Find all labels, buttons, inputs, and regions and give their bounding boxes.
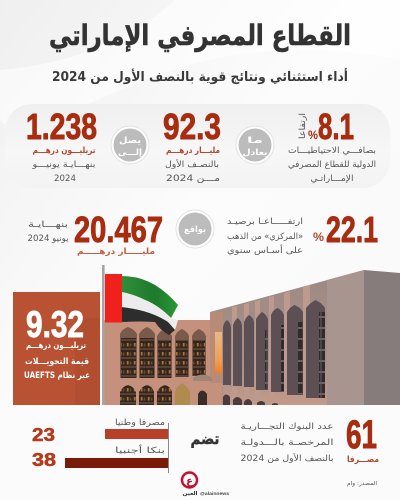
bar chart: national and foreign banks: 23 [32, 425, 55, 445]
bar chart: national and foreign banks [32, 418, 169, 473]
stat: 61 banks: 61 [346, 413, 377, 457]
stat: 22.1 percent: «المركزي» من الذهب [227, 232, 303, 242]
bar chart: national and foreign banks: مصرفا وطنيا [115, 418, 165, 428]
stat: 22.1 percent: % [313, 230, 324, 244]
bar chart: national and foreign banks: بنكا أجنبيا [115, 444, 165, 456]
flag of the UAE [102, 265, 178, 405]
right arches [223, 300, 325, 398]
stat: 22.1 percent: على أسـاس سنوي [227, 244, 303, 256]
stat: 8.1 percent: 8.1 [318, 106, 354, 147]
description: بالنصف الأول من 2024 [240, 453, 334, 464]
label: includes: تضم [190, 430, 220, 448]
stat row: gold reserves [28, 209, 378, 257]
stat: 1.238: تريليـــون درهـــم [32, 146, 96, 156]
building: central bank [104, 270, 400, 405]
stat: 1.238: 1.238 [26, 106, 97, 147]
stat: 61 banks [346, 413, 379, 465]
panel: top statistics [5, 104, 390, 188]
stat: 92.3 [163, 106, 221, 184]
bar chart: national and foreign banks: 38 [32, 450, 56, 470]
stat: 92.3: مـــن 2024 [166, 174, 220, 184]
panel: transfers value: عبر نظام UAEFTS [24, 371, 90, 381]
badge: equals: يعادل [242, 148, 268, 158]
stat: 20.467 [28, 209, 163, 257]
stat: 1.238 [26, 106, 97, 184]
description [240, 422, 334, 464]
stat: 20.467: بنهـــايـة [28, 220, 68, 230]
subtitle: أداء استثنائي ونتائج قوية بالنصف الأول من 2024 [52, 68, 348, 85]
panel: transfers value: تريليـــون درهـــم [26, 341, 86, 351]
logo: Al Ain News: ع [186, 476, 194, 487]
stat: 20.467: يونيو 2024 [28, 234, 69, 244]
badge: equals [236, 126, 274, 164]
section: number of banks [32, 413, 379, 473]
logo: Al Ain News [182, 472, 230, 497]
badge: amounting to [176, 210, 214, 248]
pilasters [232, 285, 310, 400]
stat: 8.1 percent: الإمـــاراتـي [310, 174, 354, 184]
stat: 8.1 percent: بصافـــي الاحتياطيـــات [288, 146, 376, 156]
stat: 61 banks: مصـــرفا [347, 455, 379, 465]
stat: 8.1 percent [288, 106, 376, 184]
panel: transfers value [13, 292, 100, 405]
stat: 22.1 percent [227, 209, 378, 256]
stat: 8.1 percent: الدولية للقطاع المصرفي [288, 160, 376, 170]
stat: 20.467: 20.467 [74, 209, 163, 250]
description: عدد البنوك التجـــاريـة [240, 422, 334, 432]
badge: amounting to: بواقع [184, 225, 206, 235]
description: المرخصـة بالـــدولـة [240, 438, 334, 448]
stat: 1.238: 2024 [54, 174, 76, 184]
panel: transfers value: قيمة التحويـــلات [25, 357, 89, 367]
stat: 20.467: مليـــــار درهـــــم [77, 247, 155, 257]
logo: Al Ain News: @alainnews [200, 491, 230, 496]
stat: 92.3: 92.3 [163, 106, 221, 147]
stat: 92.3: مليـــار درهـــم [166, 146, 220, 156]
stat: 8.1 percent: % [308, 128, 318, 142]
badge: reaches [111, 126, 149, 164]
badge: equals: ما [247, 136, 263, 146]
badge: reaches: يصل [119, 136, 141, 146]
source: المصدر: وام [347, 481, 378, 487]
stat: 22.1 percent: ارتفـــــاعـا برصيـد [227, 217, 303, 227]
badge: reaches: إلـــى [118, 148, 142, 158]
stat: 92.3: بالنصـف الأول [165, 159, 219, 170]
stat: 22.1 percent: 22.1 [326, 209, 378, 250]
left windows [120, 327, 206, 378]
panel: transfers value: 9.32 [26, 304, 84, 345]
stat: 1.238: بنهـــايـة يونيـــو [31, 160, 96, 170]
logo: Al Ain News: العين [182, 491, 198, 497]
stat: 8.1 percent: ارتفاعا [298, 113, 308, 139]
